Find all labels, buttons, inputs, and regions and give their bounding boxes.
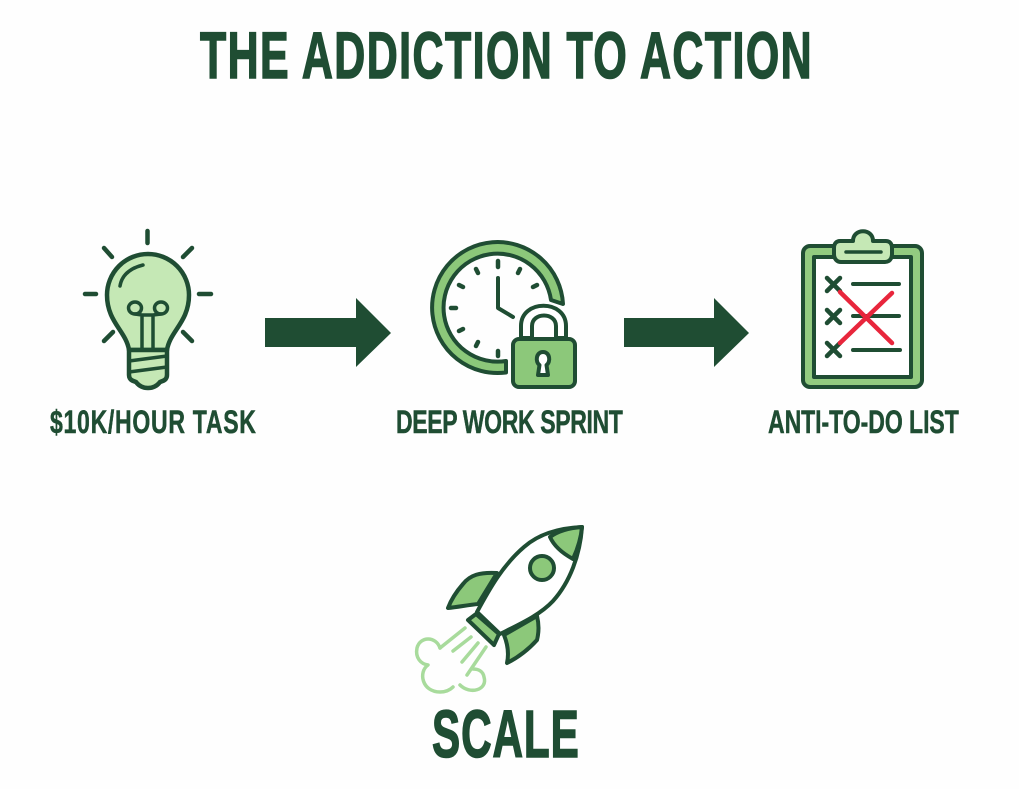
label: deep work: DEEP WORK SPRINT	[396, 404, 623, 440]
exhaust smoke	[417, 628, 486, 692]
label: anti-to-do: ANTI-TO-DO LIST	[768, 404, 959, 440]
label: scale: SCALE	[432, 696, 579, 771]
title: THE ADDICTION TO ACTION	[200, 19, 812, 92]
arrow: step two to three	[624, 298, 749, 367]
fins	[448, 573, 497, 608]
icon: clipboard with crossed list	[803, 231, 922, 387]
nozzle	[468, 614, 499, 645]
icon: rocket	[417, 527, 582, 692]
icon: light bulb	[85, 231, 211, 388]
label: task: $10K/HOUR TASK	[50, 404, 256, 440]
body	[477, 527, 582, 634]
nose cone	[550, 527, 582, 559]
arrow: step one to two	[265, 298, 391, 367]
window	[530, 556, 554, 580]
icon: clock with padlock	[432, 242, 575, 387]
